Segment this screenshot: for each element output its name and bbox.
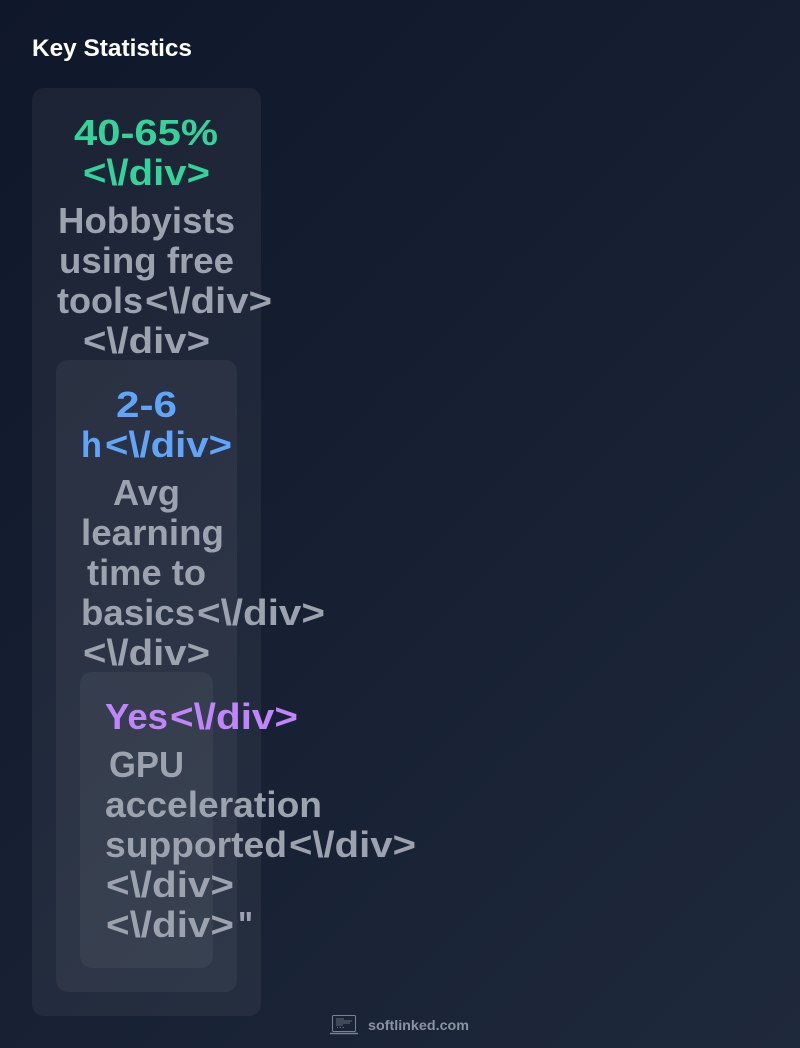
stat value: yes: <\/div> [170,696,298,737]
stat label: learning time: learning [81,512,224,553]
stat value: 2-6 h [81,384,232,465]
stat label: hobbyists: using free [59,240,234,281]
stat label: learning time: <\/div> [197,592,325,633]
stat label: learning time: time to [87,552,206,593]
stat value: 40-65%: 40-65% [74,112,218,153]
stat label: gpu acceleration: acceleration [105,784,322,825]
stat label: hobbyists: <\/div> [145,280,272,321]
title: Key Statistics [32,35,192,62]
stat value: 40-65%: <\/div> [83,152,210,193]
stat label: gpu acceleration: <\/div> [106,904,234,945]
stat label: gpu acceleration: <\/div> [289,824,416,865]
stat value: yes [105,696,298,737]
panel: nested card 3 [80,672,416,968]
stat label: gpu acceleration: <\/div> [106,864,234,905]
stat value: 40-65% [74,112,218,193]
stat label: gpu acceleration: " [238,904,253,945]
stat label: hobbyists: <\/div> [83,320,210,361]
panel: nested card 2 [56,360,416,992]
footer brand [330,1016,469,1034]
stat label: learning time: basics [81,592,195,633]
stat value: 2-6 h: 2-6 [116,384,177,425]
stat label: learning time: Avg [113,472,180,513]
stat label: gpu acceleration: supported [105,824,287,865]
stat label: hobbyists: tools [57,280,143,321]
stat label: learning time: <\/div> [83,632,210,673]
stat value: 2-6 h: h [81,424,102,465]
stat label: learning time [81,472,325,673]
brand name: softlinked.com [368,1017,469,1033]
panel: stat cards [32,88,416,1016]
stat label: hobbyists [57,200,272,361]
stat label: gpu acceleration: GPU [109,744,184,785]
stat label: gpu acceleration [105,744,416,945]
stat value: yes: Yes [105,696,168,737]
icon: laptop [330,1016,358,1034]
stat value: 2-6 h: <\/div> [105,424,232,465]
stat label: hobbyists: Hobbyists [58,200,235,241]
